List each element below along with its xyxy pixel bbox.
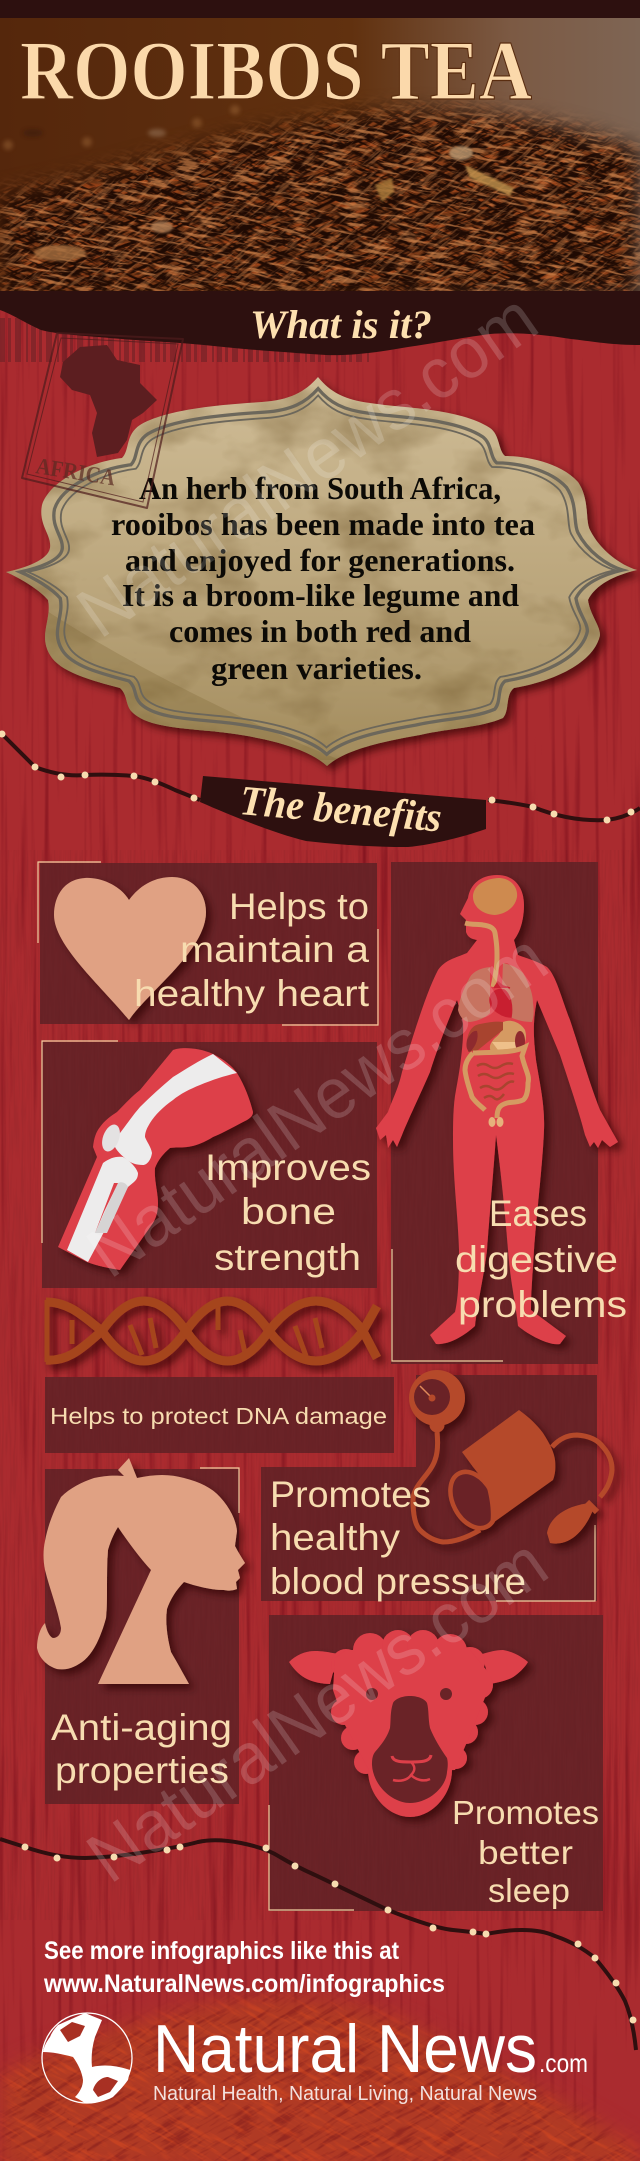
organ: stomach [490,1021,526,1053]
heading: the benefits [200,776,486,847]
panel: bone strength [58,1048,371,1278]
logo wordmark: Natural News [153,2011,537,2087]
panel: digestive [376,875,627,1344]
title: ROOIBOS TEA [20,24,532,118]
label: anti-aging: Anti-aging [51,1707,232,1748]
panel: better sleep [289,1630,599,1909]
label: blood pressure: Promotes [270,1474,431,1515]
icon: woman silhouette [37,1458,245,1684]
icon: DNA helix [46,1300,377,1362]
top bar [0,0,640,18]
heading: the benefits: The benefits [238,778,443,842]
heading band: what is it [0,291,640,355]
panel: what is it plaque [0,370,640,770]
plaque text: It is a broom-like legume and [122,577,519,613]
label: blood pressure [270,1474,526,1602]
divider: beaded line top [0,730,640,824]
plaque text: and enjoyed for generations. [125,542,515,578]
label: sleep [452,1794,599,1909]
label: digestive: problems [458,1284,627,1325]
panel: anti-aging [37,1458,245,1791]
label: sleep: Promotes [452,1794,599,1831]
call to action: See more infographics like this at [44,1937,400,1965]
watermarks: NaturalNews.com [73,1523,562,1898]
plaque text [111,470,535,686]
organ: esophagus [465,923,497,987]
label: anti-aging: properties [55,1750,229,1791]
watermarks: NaturalNews.com [63,278,552,653]
panel frames [38,862,595,1910]
watermarks: NaturalNews.com [73,918,562,1293]
label: bone: bone [241,1191,336,1232]
benefit panels [40,862,603,1911]
stamp: Africa frame: AFRICA [34,453,117,491]
label: bone [205,1147,371,1278]
plaque text: An herb from South Africa, [139,470,501,506]
label: digestive: digestive [455,1239,618,1280]
bottom tea mound [0,1985,640,2161]
label: sleep: sleep [488,1872,570,1909]
label: heart: maintain a [180,929,369,970]
logo: globe [42,2013,132,2103]
icon: knee joint [58,1048,253,1270]
label: anti-aging [51,1707,232,1791]
label: digestive: Eases [489,1193,587,1234]
label: heart [134,886,370,1014]
label: blood pressure: healthy [270,1517,401,1558]
call to action [43,1937,445,1998]
organ: liver [467,1022,503,1052]
plaque text: rooibos has been made into tea [111,506,535,542]
panel: blood pressure [270,1370,612,1602]
icon: human body [376,875,618,1344]
logo wordmark: .com [539,2048,588,2078]
organ: heart [490,982,512,1017]
plaque text: green varieties. [211,650,422,686]
label: digestive [455,1193,627,1325]
label: heart: healthy heart [134,973,370,1014]
label: bone: strength [214,1237,361,1278]
icon: heart [54,877,206,1020]
plaque text: comes in both red and [169,613,471,649]
organ: intestines [465,1047,528,1118]
label: DNA damage: Helps to protect DNA damage [50,1403,387,1429]
icon: blood pressure cuff [409,1370,612,1544]
label: blood pressure: blood pressure [270,1561,526,1602]
tea photo header [0,18,640,291]
divider: beaded line bottom [0,1839,636,2050]
stamp: Africa frame [22,333,183,508]
call to action: www.NaturalNews.com/infographics [43,1970,445,1998]
label: heart: Helps to [229,886,369,927]
label: bone: Improves [205,1147,371,1188]
watermarks [63,278,562,1898]
icon: Africa map [60,345,157,457]
organ: lungs [458,963,534,1022]
icon: sheep [289,1630,528,1817]
organ: pancreas and kidney [492,1042,518,1050]
organ: brain [473,878,517,915]
heading band: what is it: What is it? [250,302,432,347]
panel: healthy heart [54,877,370,1020]
panel texture [0,850,640,1920]
logo wordmark: Natural Health, Natural Living, Natural News [153,2083,537,2105]
label: sleep: better [478,1834,573,1871]
